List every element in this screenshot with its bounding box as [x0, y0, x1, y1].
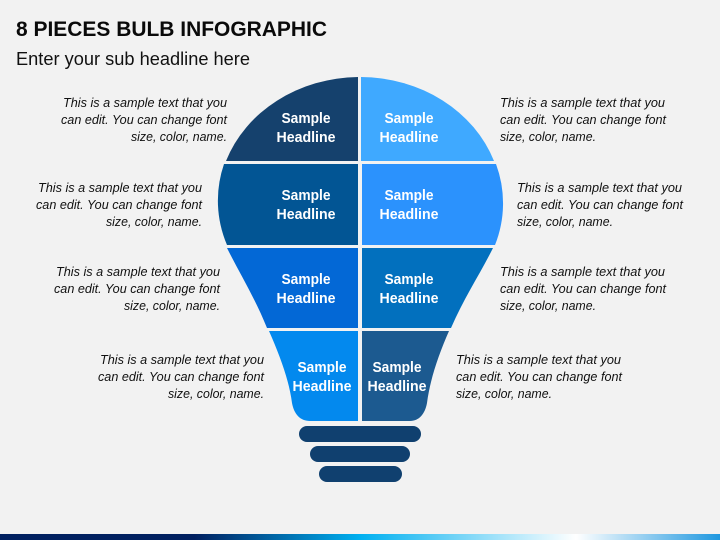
bulb piece: bottom left: Headline [292, 379, 352, 395]
bulb piece: top left: Sample [282, 111, 330, 127]
text block: right row 4 [456, 352, 622, 401]
bulb piece: top right [361, 77, 494, 161]
text block: left row 3: size, color, name. [124, 298, 220, 313]
bulb piece: third row right: Headline [380, 291, 438, 307]
text block: right row 3: This is a sample text that you [500, 264, 665, 279]
bulb piece: top left [226, 77, 358, 161]
text block: left row 2 [36, 180, 202, 229]
text block: left row 1: can edit. You can change font [61, 112, 227, 127]
bulb piece: top right: Sample [384, 111, 434, 127]
bulb piece: third row left [227, 248, 358, 328]
text block: left row 4: This is a sample text that you [100, 352, 264, 367]
text block: left row 1: size, color, name. [131, 129, 227, 144]
bulb piece: second row right: Sample [384, 188, 434, 204]
text block: left row 4: size, color, name. [168, 386, 264, 401]
text block: left row 2: can edit. You can change font [36, 197, 202, 212]
bulb piece: second row right [362, 164, 503, 245]
text block: right row 1: can edit. You can change font [500, 112, 666, 127]
bulb piece: second row left [218, 164, 358, 245]
text block: right row 1 [500, 95, 666, 144]
text block: right row 2: This is a sample text that you [517, 180, 682, 195]
bulb piece: third row left: Headline [276, 291, 336, 307]
footer gradient bar [0, 534, 720, 540]
text block: right row 2 [517, 180, 683, 229]
title: 8 PIECES BULB INFOGRAPHIC [16, 17, 327, 41]
bulb piece: third row right [362, 248, 493, 328]
text block: left row 3: can edit. You can change font [54, 281, 220, 296]
text block: right row 4: size, color, name. [456, 386, 552, 401]
text block: right row 3: size, color, name. [500, 298, 596, 313]
bulb piece: third row left: Sample [282, 272, 330, 288]
text block: right row 4: This is a sample text that you [456, 352, 621, 367]
bulb piece: bottom right [362, 331, 449, 421]
text block: right row 1: size, color, name. [500, 129, 596, 144]
text block: right row 1: This is a sample text that you [500, 95, 665, 110]
subtitle: Enter your sub headline here [16, 49, 250, 69]
text block: left row 3 [54, 264, 220, 313]
text block: left row 4 [98, 352, 264, 401]
text block: right row 3 [500, 264, 666, 313]
text block: left row 3: This is a sample text that you [56, 264, 220, 279]
text block: right row 3: can edit. You can change font [500, 281, 666, 296]
bulb piece: second row right: Headline [380, 207, 438, 223]
bulb piece: top right: Headline [380, 130, 438, 146]
text block: right row 2: size, color, name. [517, 214, 613, 229]
bulb piece: third row right: Sample [384, 272, 434, 288]
text block: left row 2: This is a sample text that you [38, 180, 202, 195]
text block: left row 2: size, color, name. [106, 214, 202, 229]
text block: left row 1 [61, 95, 227, 144]
bulb piece: bottom left [269, 331, 358, 421]
bulb piece: bottom right: Headline [368, 379, 426, 395]
bulb base [299, 426, 421, 482]
bulb piece: second row left: Headline [276, 207, 336, 223]
text block: left row 4: can edit. You can change font [98, 369, 264, 384]
bulb piece: bottom left: Sample [298, 360, 346, 376]
text block: right row 4: can edit. You can change font [456, 369, 622, 384]
bulb piece: top left: Headline [276, 130, 336, 146]
text block: right row 2: can edit. You can change font [517, 197, 683, 212]
text block: left row 1: This is a sample text that you [63, 95, 227, 110]
bulb piece: bottom right: Sample [372, 360, 422, 376]
bulb piece: second row left: Sample [282, 188, 330, 204]
